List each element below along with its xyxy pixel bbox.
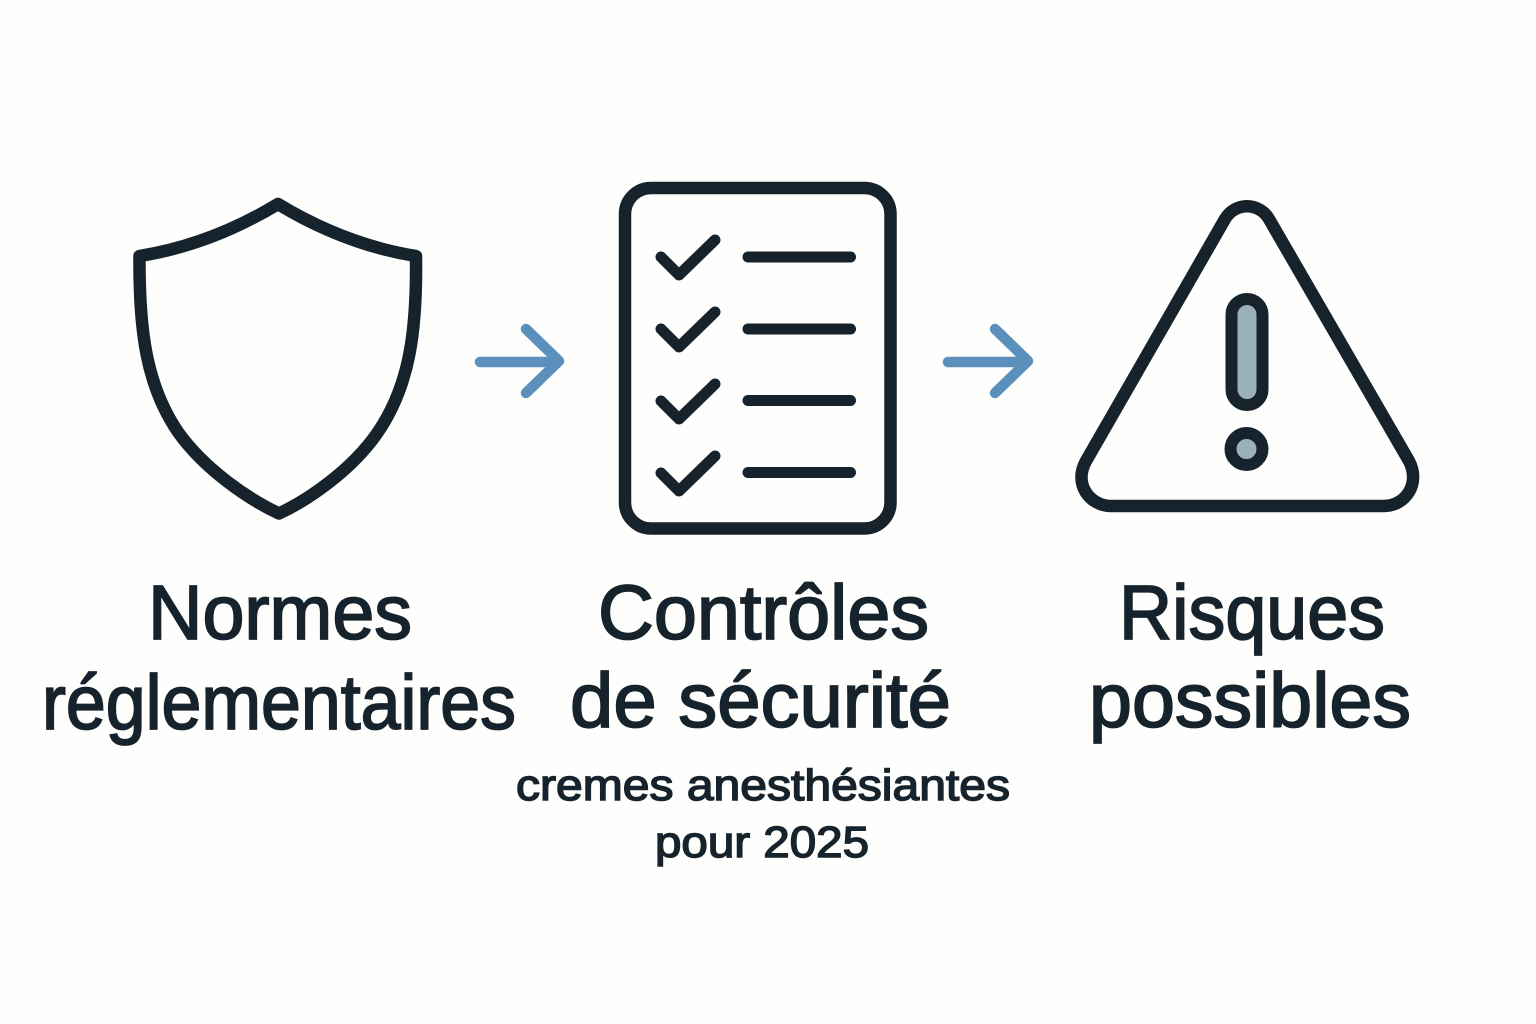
heading: risques possibles (1089, 570, 1411, 744)
arrow: checklist to warning (948, 329, 1028, 393)
heading: risques possibles: Risques (1119, 570, 1385, 656)
heading: normes réglementaires (42, 570, 516, 746)
heading: normes réglementaires: réglementaires (42, 660, 516, 746)
icon: warning triangle (1081, 206, 1413, 506)
subtitle: crèmes anesthésiantes pour 2025 (516, 761, 1010, 867)
heading: contrôles de sécurité: Contrôles (598, 570, 929, 656)
arrow: shield to checklist (480, 329, 559, 393)
heading: contrôles de sécurité: de sécurité (570, 658, 951, 744)
subtitle: crèmes anesthésiantes pour 2025: pour 2025 (655, 818, 869, 867)
heading: contrôles de sécurité (570, 570, 951, 744)
subtitle: crèmes anesthésiantes pour 2025: cremes anesthésiantes (516, 761, 1010, 810)
icon: shield (139, 204, 416, 514)
heading: risques possibles: possibles (1089, 658, 1411, 744)
heading: normes réglementaires: Normes (148, 570, 412, 656)
icon: checklist (625, 188, 890, 528)
